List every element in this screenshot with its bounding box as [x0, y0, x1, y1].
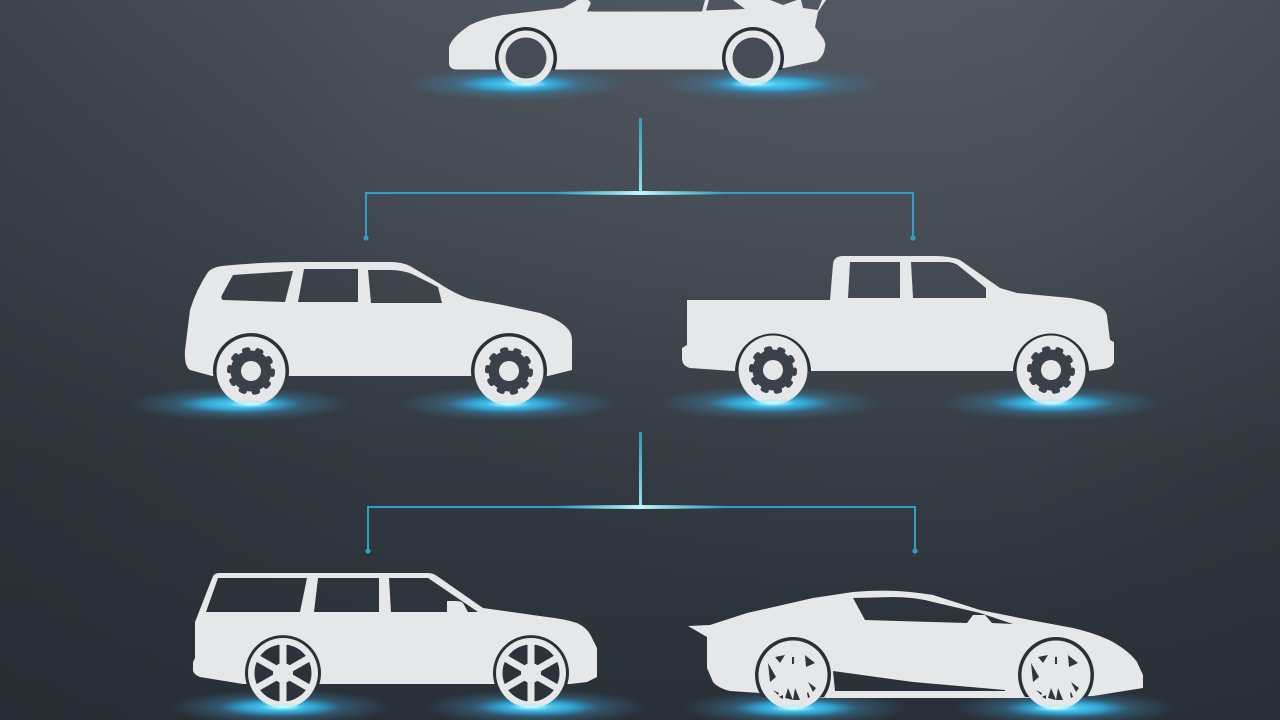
front spoked wheel [248, 638, 318, 708]
car: wagon with gear wheels [128, 262, 620, 421]
hot spot rear [507, 703, 555, 711]
rear sport wheel [758, 640, 828, 710]
connector: top car to middle row [363, 118, 916, 241]
glow left [658, 386, 882, 420]
wheel arches [495, 27, 784, 70]
wheel arches [735, 334, 1089, 372]
car: sports coupe [683, 591, 1178, 720]
wheel arches [213, 333, 547, 376]
body and windows [682, 256, 1114, 371]
connector: middle row to bottom row [365, 432, 918, 554]
body and windows [193, 573, 597, 684]
wheel arches [245, 635, 569, 684]
hot spot front [259, 703, 307, 711]
glow left [168, 690, 392, 720]
hot spot front [1032, 704, 1080, 712]
hot spot rear [485, 400, 533, 408]
glow rear [658, 67, 882, 101]
body and windows [185, 262, 572, 376]
hot spot rear [729, 80, 777, 88]
front gear wheel [216, 336, 286, 406]
body, window and side intake [688, 591, 1143, 698]
glow left [683, 691, 907, 720]
glow right [940, 386, 1164, 420]
body [449, 0, 826, 70]
car: pickup truck [658, 256, 1164, 420]
glow left [128, 387, 352, 421]
car: top convertible with spoiler [406, 0, 882, 101]
front gear wheel [738, 336, 808, 404]
rear spoked wheel [496, 638, 566, 708]
rear gear wheel [474, 336, 544, 406]
glow front [406, 67, 630, 101]
hot spot rear [769, 704, 817, 712]
front wheel [498, 30, 554, 86]
car: estate with spoked wheels [168, 573, 648, 720]
glow right [424, 690, 648, 720]
hot spot front [227, 400, 275, 408]
front sport wheel [1022, 640, 1090, 710]
hot spot front [749, 399, 797, 407]
hot spot rear [1027, 399, 1075, 407]
rear gear wheel [1016, 336, 1086, 404]
hot spot front [502, 80, 550, 88]
glow right [954, 691, 1178, 720]
rear wheel [726, 30, 780, 86]
wheel arches [755, 637, 1094, 697]
glow right [396, 387, 620, 421]
